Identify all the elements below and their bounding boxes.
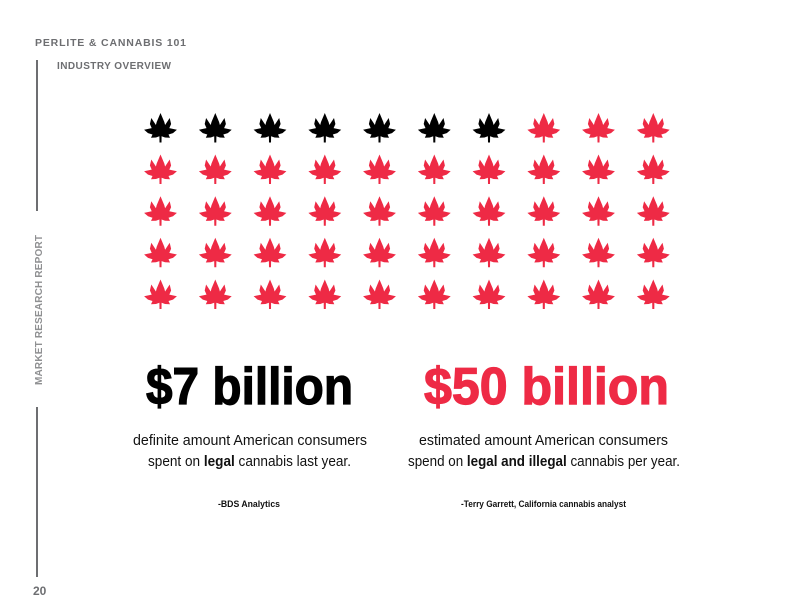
row 4: [144, 238, 670, 267]
sidebar rule: bottom: [36, 407, 38, 577]
source: Terry Garrett: -Terry Garrett, California cannabis analyst: [461, 499, 626, 509]
sidebar rule: top: [36, 60, 38, 211]
pictogram: 50 cannabis leaves, 7 black and 43 red: [144, 113, 670, 309]
page number: 20: [33, 584, 47, 598]
row 2: [144, 154, 670, 184]
stat: legal spending: [133, 358, 371, 509]
header: section title: INDUSTRY OVERVIEW: [57, 61, 172, 72]
figure: $7 billion: $7 billion: [146, 358, 353, 416]
stat: total spending: [408, 358, 680, 509]
row 5: [144, 280, 670, 309]
source: BDS Analytics: -BDS Analytics: [218, 499, 280, 509]
row 3: [144, 196, 670, 226]
description: legal spending: definite amount American consumers: [133, 433, 367, 449]
header: report title: PERLITE & CANNABIS 101: [35, 37, 186, 49]
description: legal and illegal spending: estimated amount American consumers: [419, 433, 668, 449]
sidebar label: MARKET RESEARCH REPORT: [34, 235, 45, 385]
row 1: [144, 113, 670, 142]
figure: $50 billion: $50 billion: [424, 358, 669, 416]
description: legal and illegal spending: spend on legal and illegal cannabis per year.: [408, 454, 689, 470]
description: legal spending: spent on legal cannabis last year.: [148, 454, 359, 470]
